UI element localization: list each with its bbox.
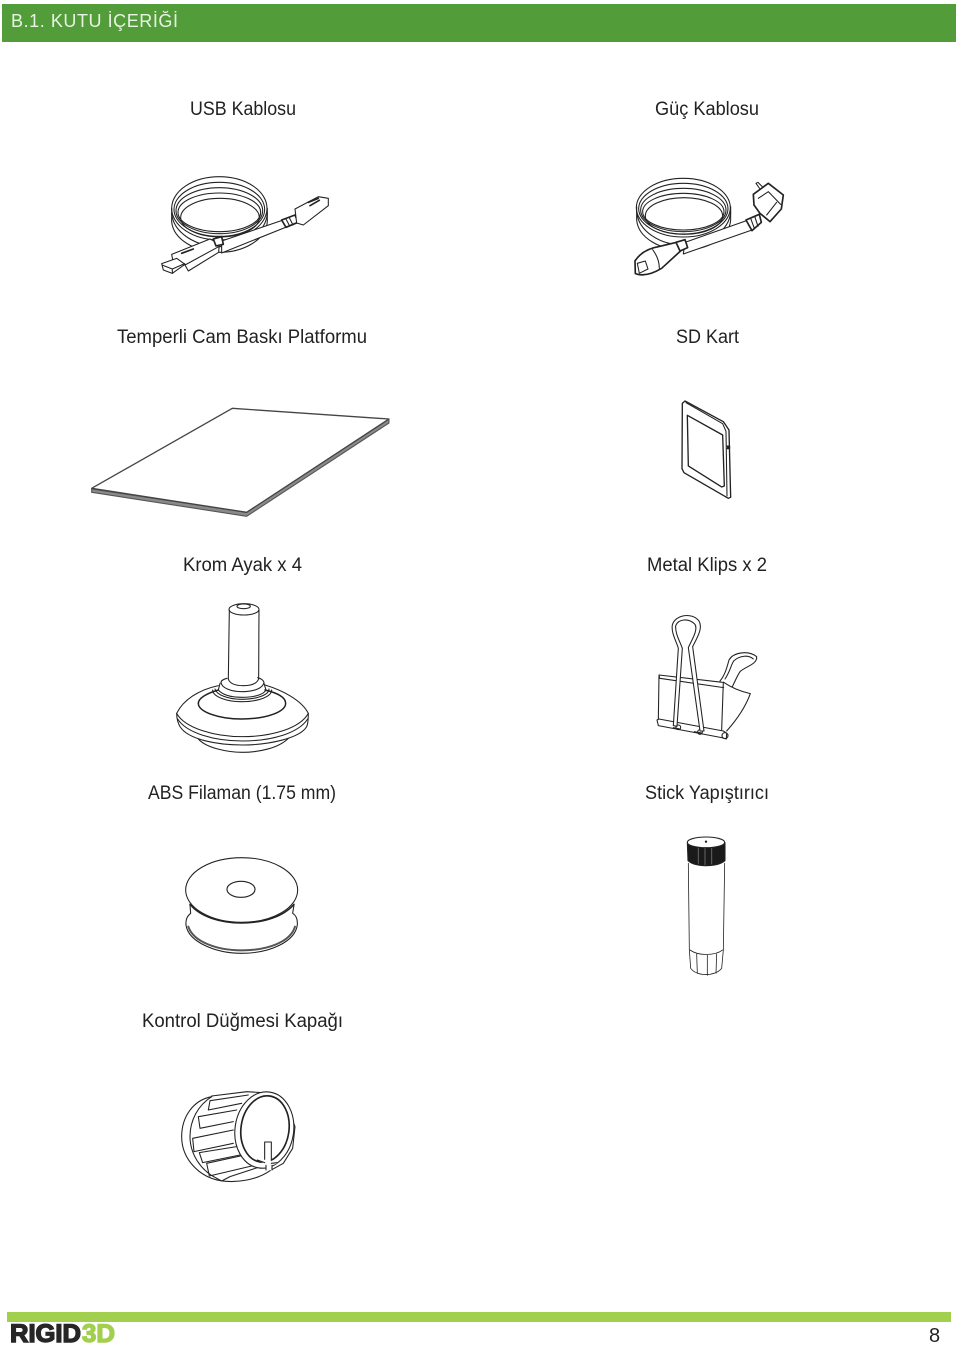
icon: power cable [635, 178, 783, 275]
icon: glue stick [687, 837, 725, 975]
icon: USB cable [162, 177, 328, 273]
panel: SD card [676, 327, 740, 498]
footer [7, 1312, 951, 1346]
icon: binder clip [657, 615, 757, 739]
panel: USB cable [162, 99, 328, 273]
icon: SD card [682, 401, 731, 498]
label: SD Kart: SD Kart [676, 327, 740, 348]
panel: ABS filament [148, 783, 336, 953]
label: Stick Yapıştırıcı: Stick Yapıştırıcı [645, 783, 769, 804]
panel: glass platform [92, 327, 389, 516]
label: USB Kablosu: USB Kablosu [190, 99, 296, 120]
label: Krom Ayak x 4: Krom Ayak x 4 [183, 555, 302, 576]
label: ABS Filaman (1.75 mm): ABS Filaman (1.75 mm) [148, 783, 336, 804]
panel: glue stick [645, 783, 769, 975]
label: Kontrol Düğmesi Kapağı: Kontrol Düğmesi Kapağı [142, 1011, 343, 1032]
icon: glass plate [92, 408, 389, 516]
label: Güç Kablosu: Güç Kablosu [655, 99, 759, 120]
logo [10, 1320, 115, 1346]
icon: knob cap [182, 1088, 299, 1182]
panel: power cable [635, 99, 783, 275]
panel: chrome foot [177, 555, 308, 752]
icon: filament spool [186, 858, 298, 953]
label: Temperli Cam Baskı Platformu: Temperli Cam Baskı Platformu [117, 327, 367, 348]
footer bar [7, 1312, 951, 1322]
panel: metal clips [647, 555, 767, 739]
panel: control knob cap [142, 1011, 343, 1182]
header bar [2, 4, 956, 42]
label: Metal Klips x 2: Metal Klips x 2 [647, 555, 767, 576]
title: B.1. KUTU İÇERİĞİ [11, 10, 178, 31]
icon: chrome foot [177, 604, 308, 752]
